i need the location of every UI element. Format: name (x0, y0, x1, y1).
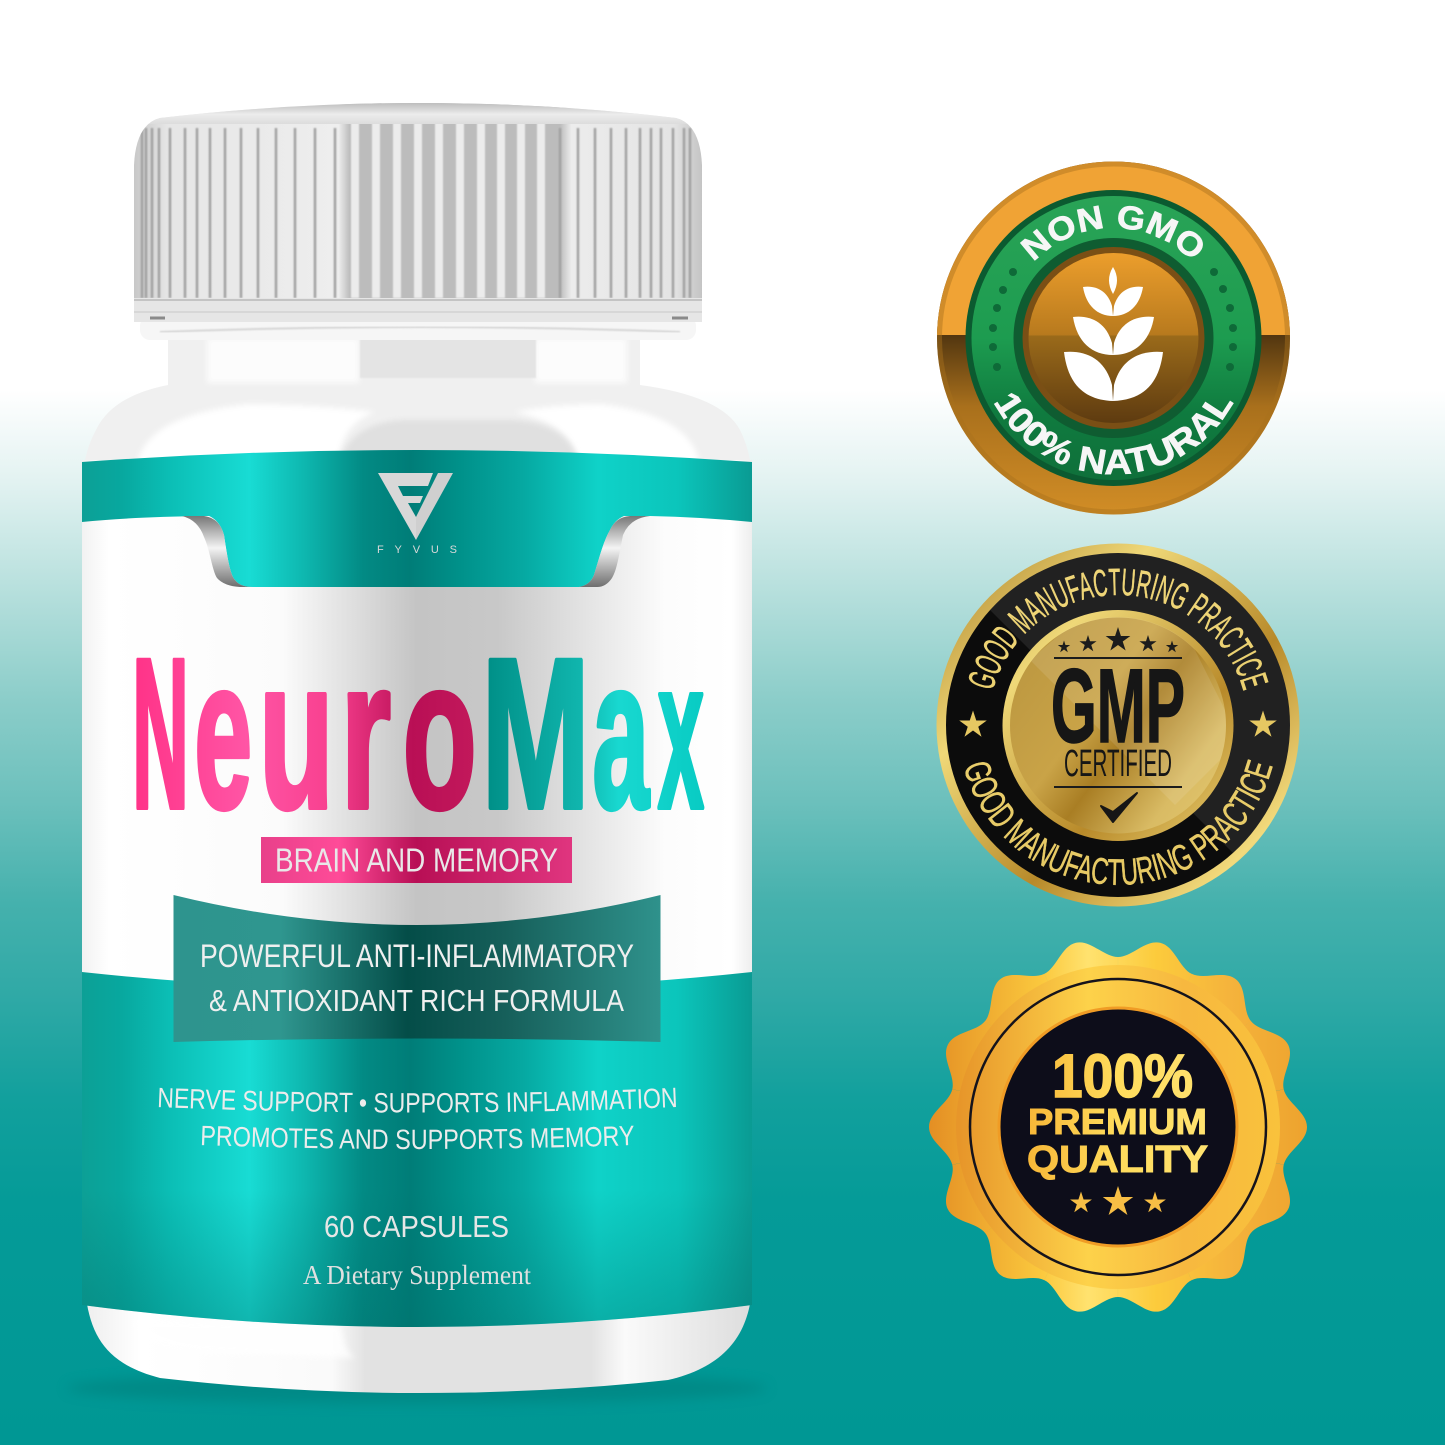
label notch with chrome edges (182, 514, 650, 587)
seal text: 100%: 100% (1052, 1042, 1193, 1110)
scalloped seal (925, 935, 1311, 1319)
top stars (1058, 627, 1178, 652)
benefits text: NERVE SUPPORT • SUPPORTS INFLAMMATION (158, 1088, 676, 1113)
word: Max: M (481, 614, 590, 854)
seal stars (1070, 1186, 1166, 1215)
badge: GMP certified (936, 544, 1300, 906)
dietary supplement note: A Dietary Supplement (303, 1260, 531, 1290)
word: Neuro: r (340, 614, 391, 854)
seal text: premium: PREMIUM (1028, 1101, 1207, 1142)
product name: NeuroMax (132, 614, 704, 854)
arc text: good manufacturing practice (top): GOOD MANUFACTURING PRACTICE (968, 568, 1268, 691)
benefits text: PROMOTES AND SUPPORTS MEMORY (202, 1126, 634, 1150)
certified label: CERTIFIED (1064, 743, 1172, 785)
GMP heading: GMP (1051, 648, 1185, 765)
bottle: x (658, 614, 704, 854)
word: Neuro: e (194, 614, 252, 854)
badge: non GMO 100% natural (937, 162, 1290, 514)
label top band (82, 450, 752, 522)
label lower teal area (82, 972, 752, 1327)
bottle (82, 103, 752, 1403)
label white area (82, 460, 752, 1000)
seal text: quality: QUALITY (1027, 1139, 1208, 1181)
icon: check mark (1101, 793, 1137, 822)
badge: 100% premium quality (925, 935, 1311, 1319)
bottle base (86, 1298, 751, 1393)
logo: FYVUS: FYVUS (377, 544, 457, 556)
icon: wheat sprig (1064, 267, 1163, 401)
capsule count: 60 CAPSULES (324, 1209, 509, 1244)
gold centre disc (1002, 600, 1240, 841)
word: Max: a (592, 614, 650, 854)
arc text: non GMO: NON GMO (1020, 205, 1203, 261)
arc text: 100% natural: 100% NATURAL (994, 393, 1234, 474)
subtitle bar: brain and memory: BRAIN AND MEMORY (275, 842, 558, 878)
word: Neuro: u (259, 614, 334, 854)
word: Neuro: o (403, 614, 477, 854)
subtitle bar: brain and memory (261, 837, 572, 883)
logo: FYVUS (377, 473, 457, 556)
ring dots (989, 268, 1237, 371)
arc text: good manufacturing practice (bottom): GOOD MANUFACTURING PRACTICE (965, 759, 1273, 886)
side stars (959, 710, 1277, 737)
word: Neuro (132, 614, 477, 854)
bottle cap (130, 103, 710, 322)
word: Neuro: N (132, 614, 189, 854)
formula panel: & ANTIOXIDANT RICH FORMULA (209, 983, 624, 1018)
formula panel (174, 895, 660, 1042)
benefits text (158, 1088, 676, 1150)
formula panel: POWERFUL ANTI-INFLAMMATORY (200, 938, 634, 974)
bottle shadow (67, 1372, 767, 1404)
bottle neck and shoulder (83, 316, 752, 475)
